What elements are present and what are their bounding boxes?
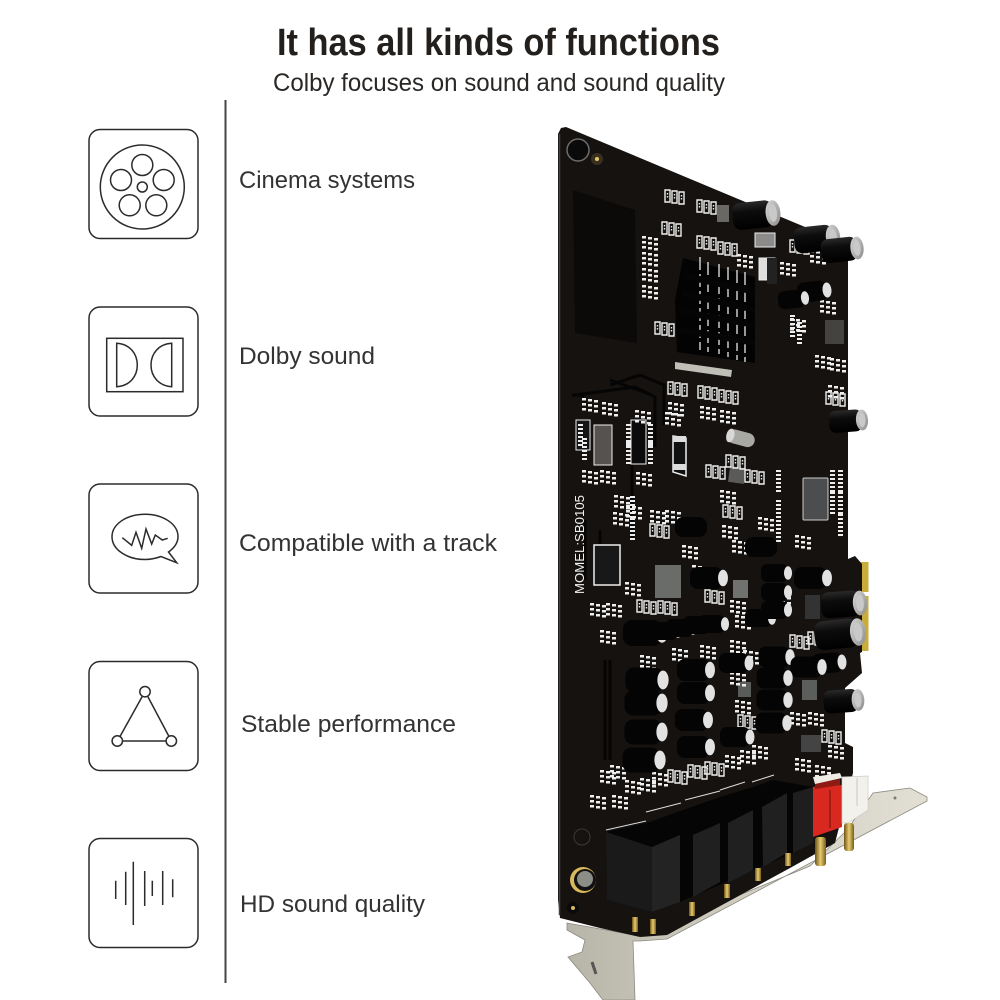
mounting screw [567, 829, 596, 914]
integrated circuits [576, 205, 844, 752]
circuit board [558, 127, 862, 937]
blank board area [573, 190, 637, 343]
gold edge connector [860, 562, 868, 651]
icon: sound bars [89, 838, 198, 948]
label: hd sound quality: HD sound quality [240, 891, 425, 918]
sound card photo [558, 127, 927, 1000]
label: dolby sound: Dolby sound [239, 343, 375, 370]
label: stable performance: Stable performance [241, 711, 456, 738]
feature: dolby sound [89, 307, 375, 416]
metal bracket [567, 788, 927, 1000]
subtitle: Colby focuses on sound and sound quality [273, 69, 725, 97]
gold pins [632, 823, 854, 934]
title: It has all kinds of functions [277, 22, 720, 64]
heatsink [675, 257, 755, 377]
label: compatible with a track: Compatible with a track [239, 530, 498, 557]
icon: triangle network [89, 662, 198, 770]
model number: MOMEL:SB0105 [573, 495, 587, 594]
vertical divider [224, 100, 226, 983]
icon: speech bubble with waveform [89, 484, 198, 593]
capacitors [622, 199, 869, 772]
feature: hd sound quality [89, 838, 425, 948]
board edge highlight [558, 134, 560, 915]
audio jack blocks [606, 780, 813, 912]
red RCA connector [813, 779, 842, 837]
feature: cinema systems [89, 130, 415, 238]
feature: compatible with a track [89, 484, 498, 593]
mounting hole top [567, 139, 603, 165]
label: cinema systems: Cinema systems [239, 167, 415, 194]
silkscreen component clusters [578, 190, 846, 830]
icon: film reel [89, 130, 198, 238]
crystal oscillator [725, 428, 756, 449]
traces [572, 375, 664, 760]
feature: stable performance [89, 662, 456, 770]
icon: double D [89, 307, 198, 416]
white RCA connector [813, 773, 868, 823]
